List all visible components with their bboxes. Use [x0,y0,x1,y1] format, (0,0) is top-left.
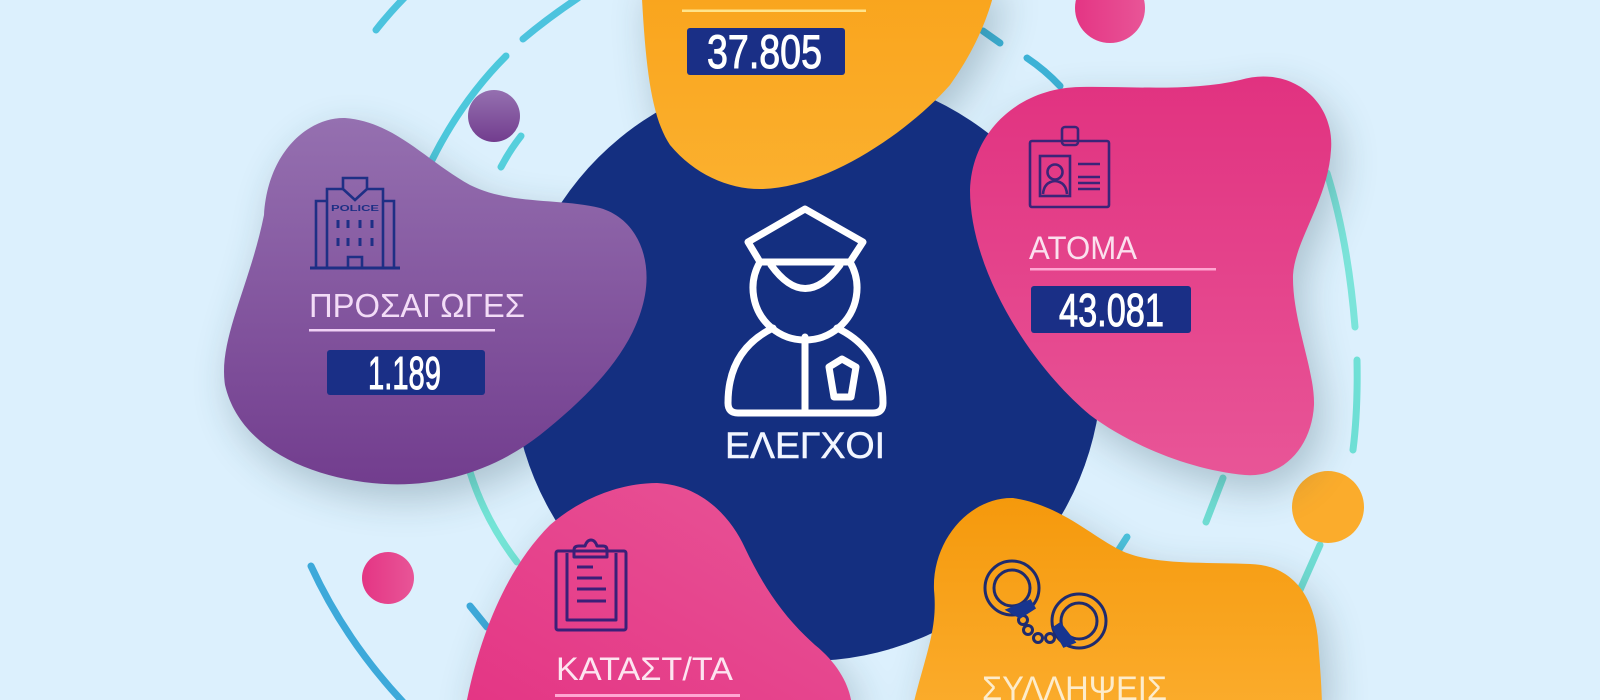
icon: handcuffs [985,561,1106,648]
central navy circle [512,71,1102,661]
value badge: 37.805 [707,25,822,78]
panel: pink ΑΤΟΜΑ [970,76,1331,475]
panel: purple ΠΡΟΣΑΓΩΓΕΣ [224,118,647,484]
icon: clipboard [556,540,626,630]
central police officer icon [728,209,883,413]
panel: orange ΣΥΛΛΗΨΕΙΣ [912,498,1322,700]
label: ΑΤΟΜΑ: ΑΤΟΜΑ [1029,230,1138,266]
decorative ball: pink left [362,552,414,604]
dashed ring arcs [311,0,1357,700]
decorative ball: purple [468,90,520,142]
label: ΚΑΤΑΣΤ/ΤΑ: ΚΑΤΑΣΤ/ΤΑ [556,651,734,687]
panel: pink ΚΑΤΑΣΤ/ΤΑ [465,483,852,700]
value badge: 1.189 [368,347,441,399]
value badge: 43.081 [1059,284,1164,336]
icon: id card [1030,127,1109,207]
central label: ΕΛΕΓΧΟΙ [725,425,885,466]
icon: police station [310,178,400,268]
label: ΠΡΟΣΑΓΩΓΕΣ: ΠΡΟΣΑΓΩΓΕΣ [309,287,525,324]
soft blob shadows [232,0,1339,700]
icon text: POLICE: POLICE [331,204,380,213]
panel: orange top [641,0,997,189]
decorative ball: orange [1292,471,1364,543]
decorative ball: pink top [1075,0,1145,43]
